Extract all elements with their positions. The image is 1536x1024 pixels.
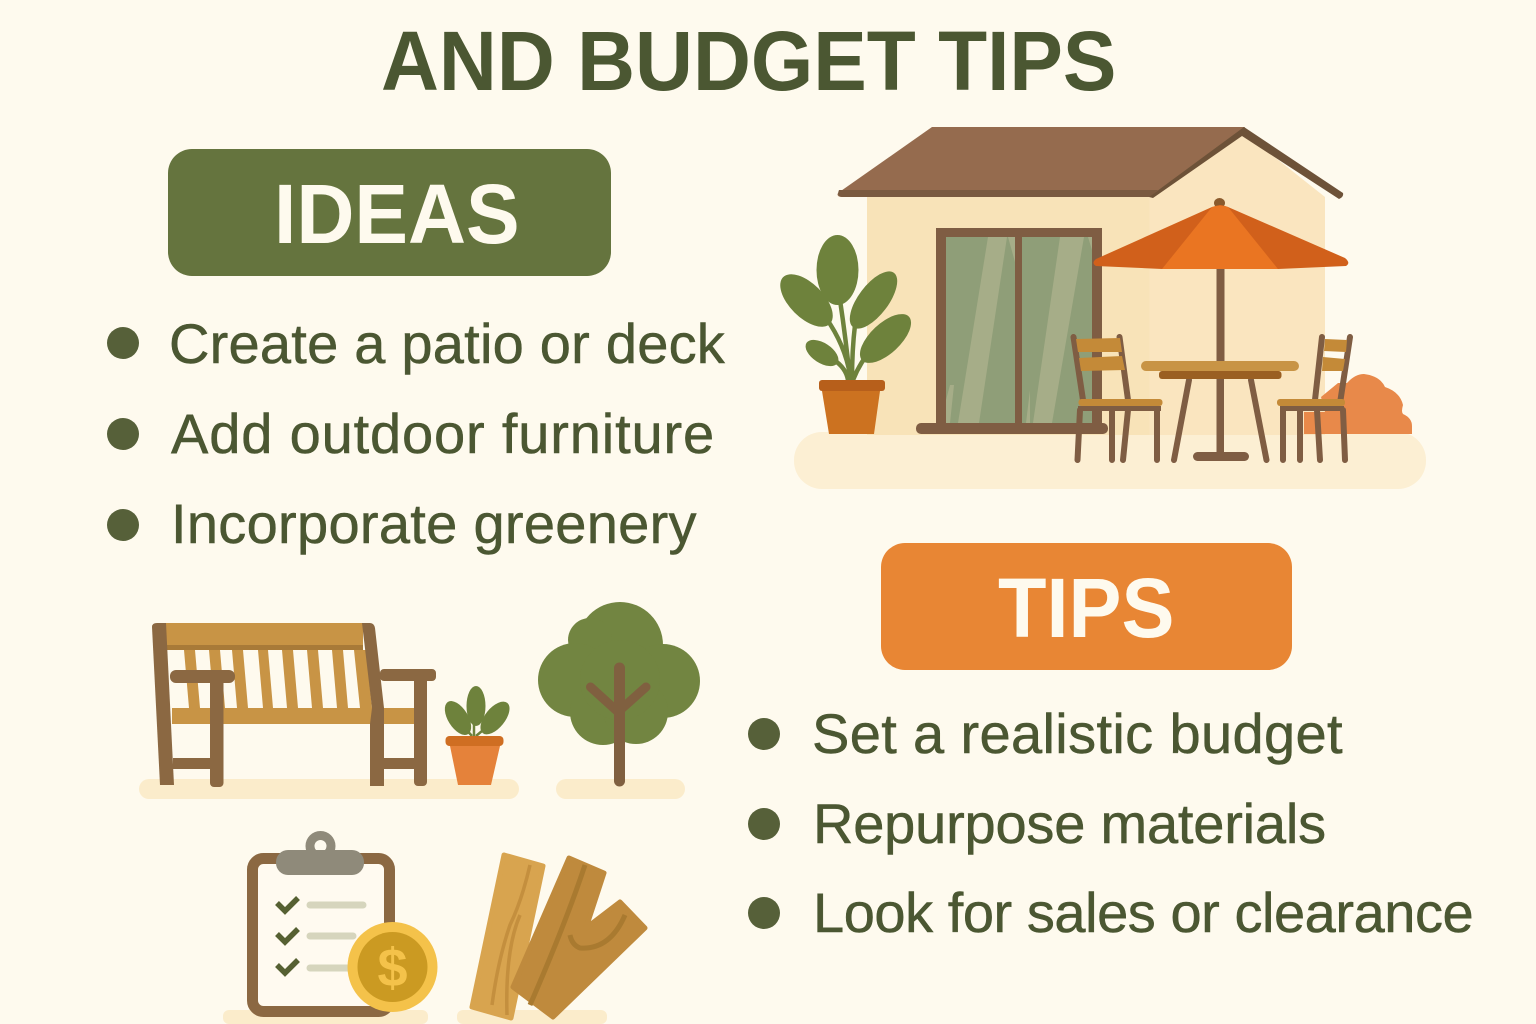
left chair (1074, 337, 1162, 460)
icon: wood planks (457, 855, 645, 1024)
bench slats (184, 650, 372, 708)
icon: small potted plant (439, 686, 515, 785)
panel: tips heading (881, 543, 1292, 670)
tips list: Repurpose materials (813, 792, 1326, 855)
ideas list: Incorporate greenery (171, 492, 697, 555)
tips list: Look for sales or clearance (813, 881, 1473, 944)
panel: ideas heading: IDEAS (274, 167, 520, 261)
icon: clipboard with coin: $ (377, 938, 408, 998)
panel: tips heading: TIPS (998, 561, 1174, 655)
title: AND BUDGET TIPS (381, 14, 1116, 108)
umbrella (1094, 198, 1348, 461)
house walls (867, 197, 1150, 435)
icon: clipboard with coin (223, 836, 438, 1024)
ground (794, 432, 1426, 489)
tips list: Set a realistic budget (812, 702, 1343, 765)
illustration: bench (139, 623, 519, 799)
tips list (748, 702, 1473, 944)
ideas list (107, 312, 726, 555)
roof (838, 127, 1245, 197)
bush (1304, 374, 1412, 434)
icon: tree (538, 602, 700, 799)
potted plant (771, 235, 919, 434)
right chair (1277, 337, 1350, 460)
panel: ideas heading (168, 149, 611, 276)
sliding door (916, 228, 1108, 434)
table (1141, 361, 1299, 460)
illustration: house and patio (771, 127, 1426, 489)
ideas list: Create a patio or deck (169, 312, 725, 375)
ideas list: Add outdoor furniture (171, 402, 715, 465)
